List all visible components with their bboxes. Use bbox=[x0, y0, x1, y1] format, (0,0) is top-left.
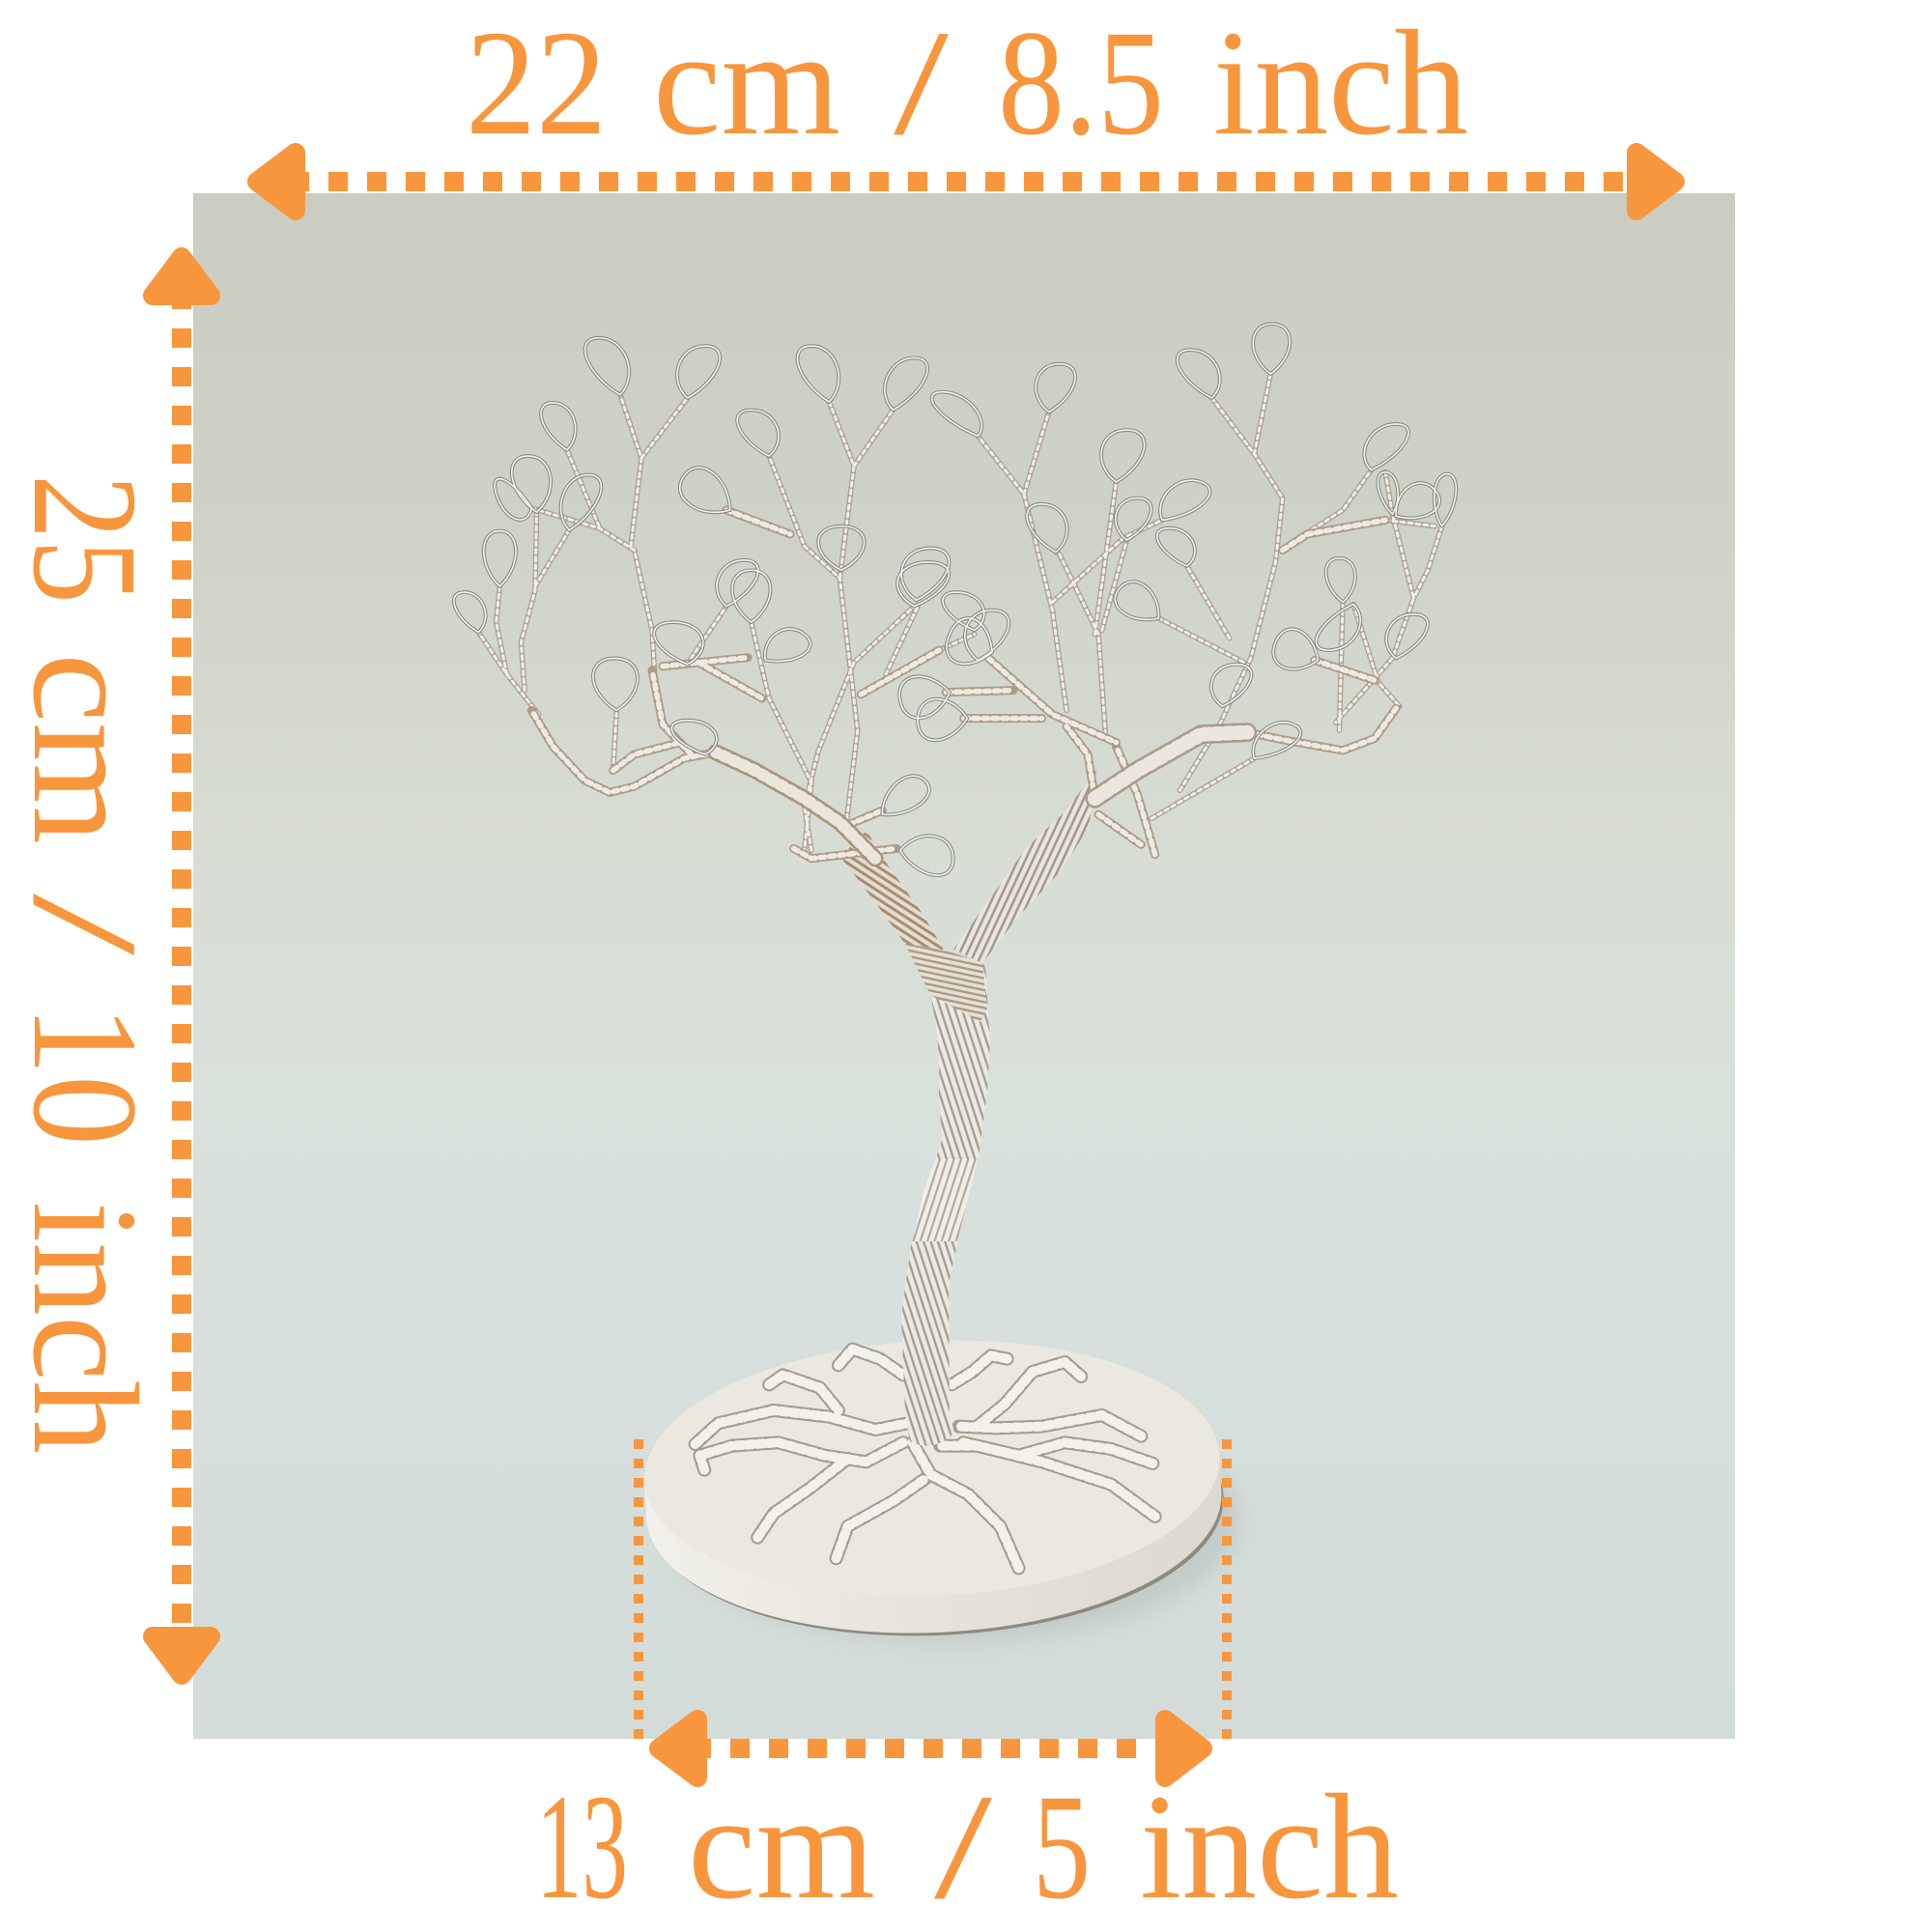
branches, wires and loop tips bbox=[450, 324, 1458, 878]
width dimension label: 8.5 bbox=[998, 0, 1164, 166]
disc base bbox=[639, 1328, 1241, 1648]
base width arrow bbox=[659, 1719, 1203, 1777]
base width dimension label: 5 bbox=[1033, 1763, 1091, 1930]
trunk and main fork bbox=[840, 770, 1096, 1449]
base width dimension label: cm bbox=[688, 1763, 875, 1930]
height arrow bbox=[153, 257, 211, 1675]
base width dimension label: inch bbox=[1140, 1763, 1399, 1930]
height dimension label: inch bbox=[2, 1202, 169, 1454]
height dimension label: / bbox=[2, 894, 169, 956]
width dimension label: inch bbox=[1213, 0, 1468, 166]
height dimension label: 10 bbox=[2, 1005, 169, 1146]
width dimension label: cm bbox=[653, 0, 840, 166]
photo background panel bbox=[193, 193, 1735, 1739]
width dimension label: 22 bbox=[466, 0, 607, 166]
width dimension label: / bbox=[894, 0, 950, 166]
base width guide lines bbox=[639, 1439, 1227, 1739]
base width dimension label: 13 bbox=[536, 1763, 628, 1930]
base width dimension label: / bbox=[934, 1763, 993, 1930]
roots bbox=[696, 1350, 1155, 1568]
width arrow bbox=[257, 153, 1675, 211]
wire tree photo subject bbox=[450, 324, 1458, 1648]
height dimension label: 25 bbox=[2, 474, 169, 604]
height dimension label: cm bbox=[2, 653, 169, 844]
